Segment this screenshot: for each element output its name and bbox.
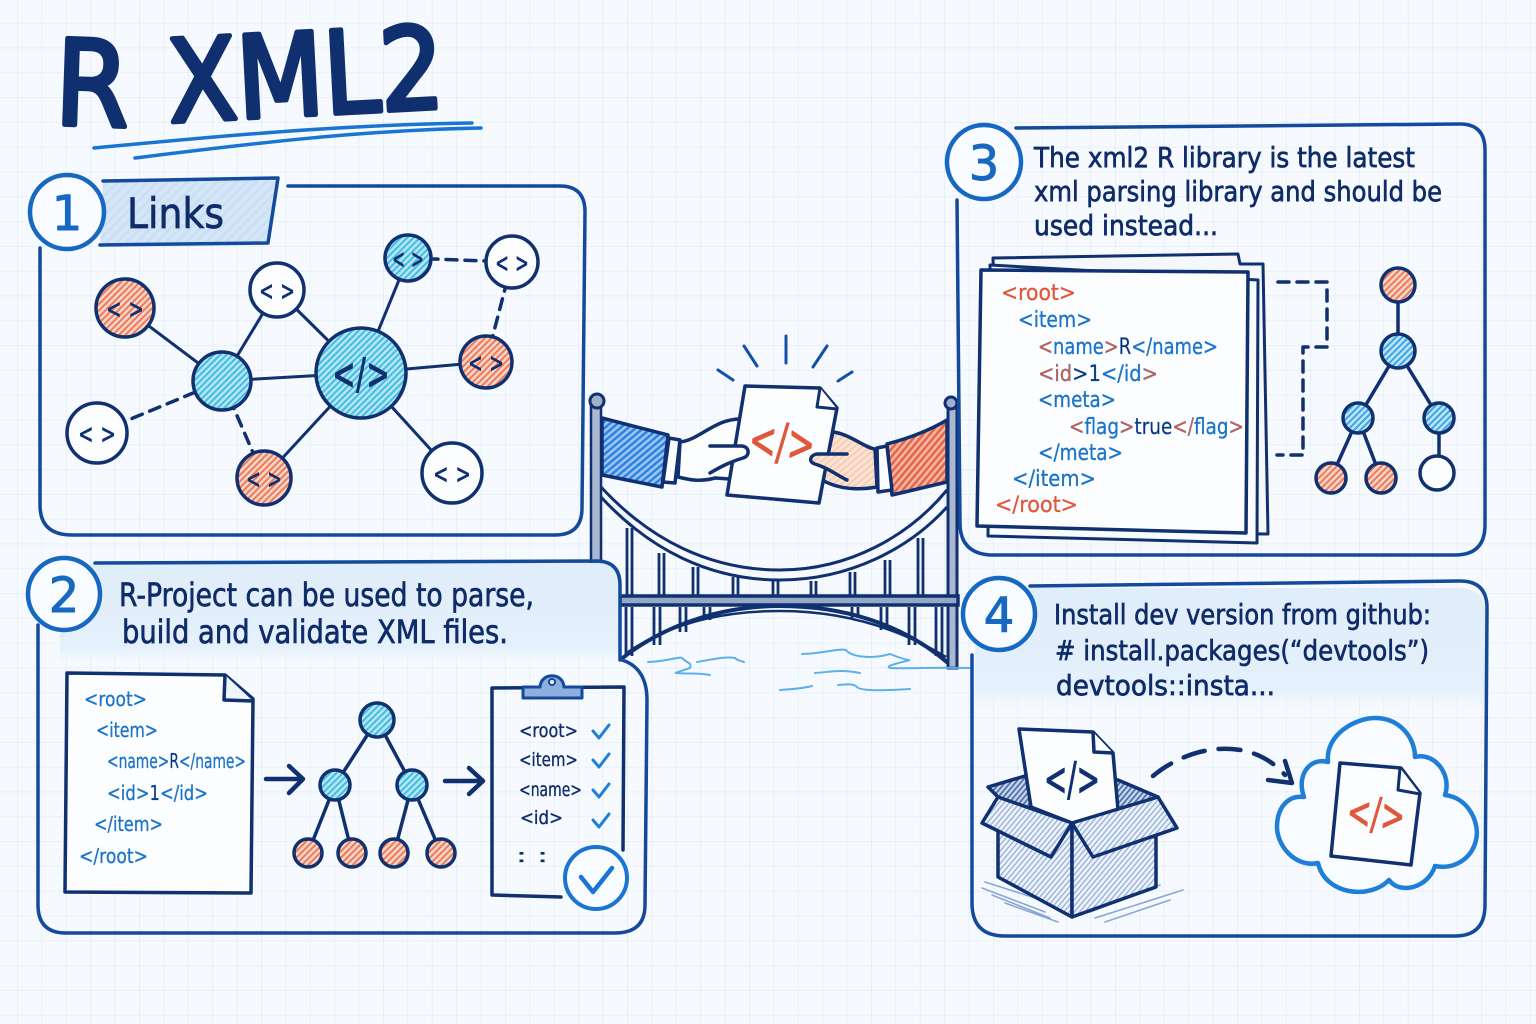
node code labels: < > <box>78 419 116 450</box>
network nodes <box>67 235 538 505</box>
XML code lines: <root> <box>1001 281 1076 306</box>
panel 4: install dev version <box>963 578 1487 936</box>
node code labels: < > <box>468 348 504 379</box>
box shadow <box>982 882 1183 922</box>
bridge main cable <box>601 487 947 580</box>
xml tree diagram <box>1316 268 1454 493</box>
dashed connector to tree <box>1277 282 1327 455</box>
right hand with red sleeve <box>822 420 947 495</box>
validation clipboard <box>492 676 627 909</box>
node code labels: < > <box>392 244 424 275</box>
panel 4 description <box>1054 598 1431 702</box>
panel 4 description: devtools::insta... <box>1056 669 1275 702</box>
bridge suspension hangers <box>626 528 942 656</box>
document code lines: </root> <box>79 844 148 868</box>
title underline <box>94 123 481 158</box>
panel 2 description: build and validate XML files. <box>122 613 508 651</box>
cloud document code symbol: </> <box>1345 787 1407 842</box>
XML code lines: <id>1</id> <box>1038 362 1158 387</box>
links ribbon <box>100 178 278 245</box>
badge 4 <box>963 578 1035 650</box>
bridge deck <box>620 596 958 605</box>
panel 3 description: The xml2 R library is the latest <box>1033 141 1415 174</box>
handed-over XML document <box>727 386 837 503</box>
checklist tags: : : <box>516 845 548 867</box>
badge 2 <box>28 558 100 630</box>
node code labels: < > <box>259 276 295 307</box>
links heading: Links <box>127 189 224 238</box>
cloud with document <box>1277 718 1477 892</box>
checklist tags: <name> <box>519 779 582 801</box>
document code lines: <root> <box>84 687 147 711</box>
badge 1: 1 <box>52 186 82 242</box>
panel 2: parse, build and validate <box>28 558 647 933</box>
node code labels: </> <box>332 349 390 400</box>
arrow to tree <box>266 766 303 793</box>
XML code lines: </root> <box>995 493 1078 518</box>
panel 3 description: used instead... <box>1034 209 1218 242</box>
bridge towers <box>590 394 957 668</box>
checklist tags: <id> <box>520 807 563 829</box>
document code lines: <id>1</id> <box>107 781 208 805</box>
node code labels <box>78 244 529 495</box>
checklist tags: <item> <box>519 749 578 771</box>
XML code lines: <flag>true</flag> <box>1069 415 1244 440</box>
panel 3 description: xml parsing library and should be <box>1034 175 1442 208</box>
links network edges <box>97 258 512 478</box>
left hand with blue sleeve <box>602 418 745 487</box>
checklist tags: <root> <box>519 720 578 742</box>
XML code lines: <meta> <box>1038 388 1116 413</box>
panel 4 description: # install.packages(“devtools”) <box>1055 634 1429 667</box>
panel 2 description: R-Project can be used to parse, <box>119 576 534 614</box>
document code symbol: </> <box>747 410 817 474</box>
badge 2: 2 <box>49 568 79 624</box>
bridge illustration <box>590 394 970 690</box>
badge 1 <box>30 175 104 249</box>
document code lines <box>79 687 246 868</box>
panel 3 description <box>1033 141 1442 242</box>
XML code lines: </item> <box>1012 467 1096 492</box>
badge 3: 3 <box>969 136 999 192</box>
arrow to checklist <box>445 768 483 794</box>
stacked code pages <box>977 254 1268 543</box>
XML code lines: </meta> <box>1038 441 1123 466</box>
panel 1: links <box>30 175 585 535</box>
title: R XML2: XML2 <box>164 2 447 149</box>
badge 4: 4 <box>984 588 1014 644</box>
document code lines: </item> <box>94 812 163 836</box>
water waves <box>648 650 970 690</box>
hand thumbs over document <box>710 446 847 480</box>
box document: </> <box>1044 752 1100 806</box>
panel 2 description <box>119 576 534 651</box>
title: R XML2 <box>53 2 447 155</box>
XML document with code <box>65 673 253 893</box>
validated badge <box>565 847 627 909</box>
document code lines: <name>R</name> <box>107 749 246 773</box>
XML code lines: <name>R</name> <box>1038 335 1218 360</box>
parsed tree diagram <box>294 703 455 867</box>
XML code lines: <item> <box>1018 308 1092 333</box>
badge 3 <box>947 125 1021 199</box>
node code labels: < > <box>246 464 282 495</box>
node code labels: < > <box>106 294 144 325</box>
clipboard clip <box>523 676 582 698</box>
node code labels: < > <box>495 248 529 279</box>
XML code lines <box>995 281 1244 518</box>
sparkle rays above document <box>718 336 852 381</box>
panel 4 description: Install dev version from github: <box>1054 598 1431 631</box>
title: R XML2: R <box>53 14 132 155</box>
dashed arrow to cloud <box>1153 749 1292 783</box>
checklist tags <box>516 720 582 867</box>
bridge arch <box>620 606 948 663</box>
open cardboard box with document <box>982 729 1183 922</box>
node code labels: < > <box>433 459 471 490</box>
document code lines: <item> <box>96 718 158 742</box>
box document <box>1019 729 1118 823</box>
panel 3: xml2 library <box>947 124 1485 555</box>
check marks <box>593 725 609 827</box>
